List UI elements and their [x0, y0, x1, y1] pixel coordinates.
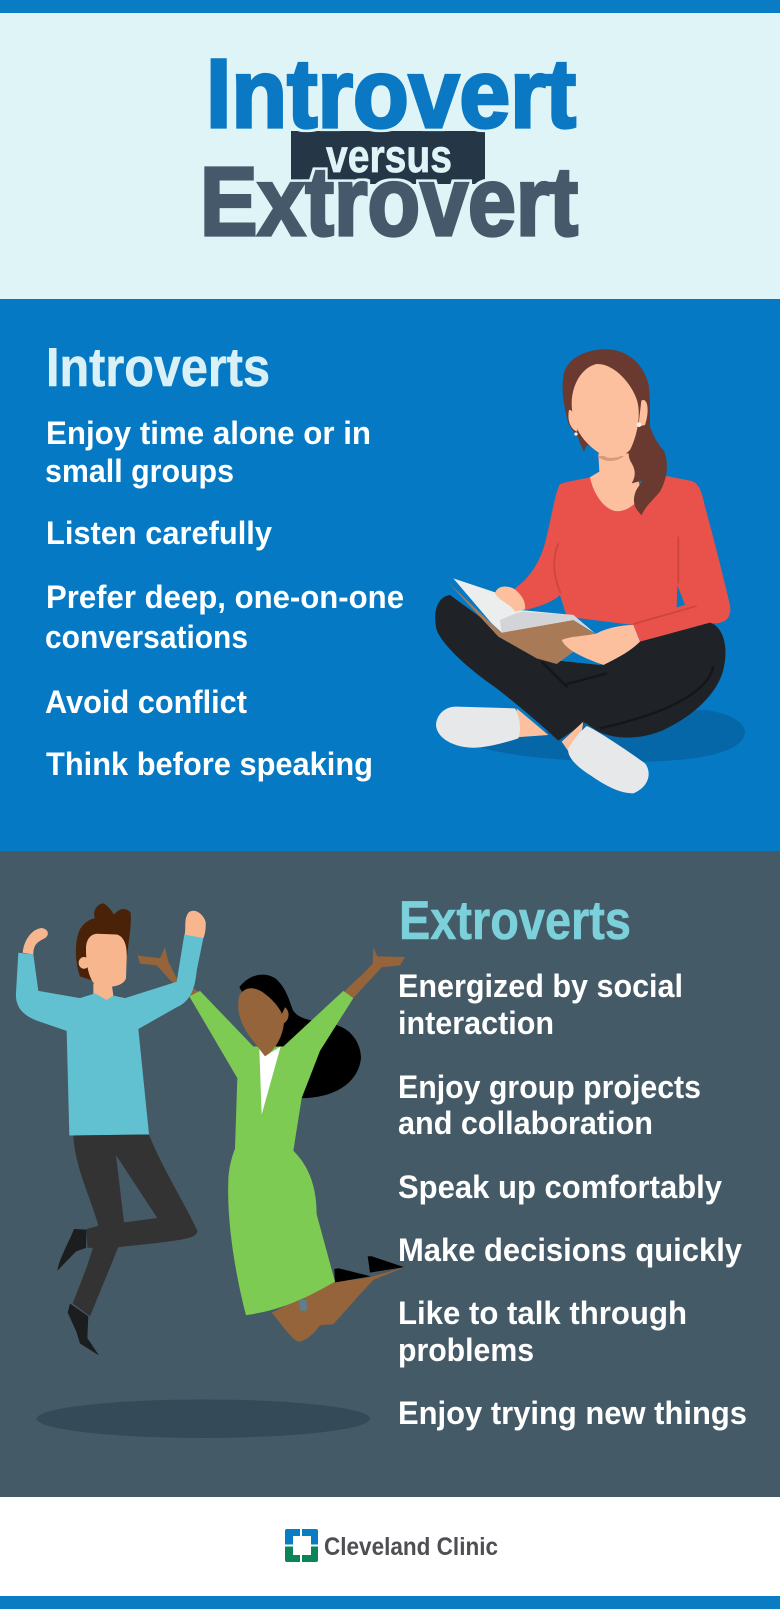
sleeve gap [677, 585, 685, 607]
title: Introvert: Introvert [206, 39, 576, 148]
list: introvert traits [45, 415, 404, 782]
right sock [562, 722, 583, 763]
list: extrovert traits: Make decisions quickly [398, 1232, 742, 1268]
woman: dress [189, 991, 353, 1315]
list: extrovert traits: Enjoy trying new things [398, 1395, 747, 1431]
list: introvert traits: Prefer deep, one-on-one [46, 579, 404, 615]
list: introvert traits: Listen carefully [46, 515, 272, 551]
logo: Cleveland Clinic wordmark: Cleveland Clinic [324, 1533, 498, 1561]
list: introvert traits: conversations [45, 619, 248, 655]
trousers [435, 595, 726, 741]
woman: gap patch [299, 1300, 307, 1311]
neck and chest [589, 453, 642, 512]
list: extrovert traits: Energized by social [398, 968, 683, 1004]
man: sweater [16, 935, 203, 1136]
woman: back hand [138, 947, 200, 998]
sweater [515, 476, 730, 642]
logo: Cleveland Clinic icon [285, 1529, 318, 1562]
panel: header [0, 13, 780, 299]
book [448, 583, 597, 664]
woman: blouse [259, 1046, 281, 1114]
socks and ankles [515, 708, 548, 737]
man: upper leg bend [87, 1225, 118, 1248]
man: face [86, 934, 127, 987]
sweater folds [554, 537, 697, 624]
earrings [637, 422, 641, 427]
list: extrovert traits: interaction [398, 1005, 554, 1041]
man: fists [23, 928, 48, 955]
trouser creases [542, 662, 713, 728]
list: extrovert traits: problems [398, 1332, 534, 1368]
hands [495, 586, 525, 612]
list: extrovert traits: Like to talk through [398, 1295, 687, 1331]
panel: introverts [0, 299, 780, 851]
woman: ear, face [280, 1007, 289, 1024]
top bar [0, 0, 780, 13]
bottom bar [0, 1596, 780, 1609]
list: introvert traits: Think before speaking [46, 746, 373, 782]
man: ear, neck [93, 984, 113, 1001]
versus box [291, 131, 485, 184]
chin shadow [597, 456, 624, 461]
hair lock [629, 397, 667, 515]
woman: forward arm [343, 947, 405, 998]
title: versus: versus [326, 130, 452, 182]
hair [563, 349, 650, 463]
heading: Extroverts: Extroverts [399, 889, 631, 951]
woman: shoes [334, 1268, 371, 1282]
list: extrovert traits: Speak up comfortably [398, 1169, 722, 1205]
face [572, 364, 639, 458]
floor shadow [480, 710, 745, 762]
woman: hair [239, 975, 361, 1098]
ears [568, 400, 648, 432]
man: shoes [57, 1229, 87, 1271]
man: hair [76, 904, 131, 985]
panel: footer [0, 1497, 780, 1596]
list: introvert traits: Avoid conflict [45, 684, 247, 720]
list: introvert traits: Enjoy time alone or in [46, 415, 371, 451]
man: trousers [73, 1134, 197, 1316]
list: extrovert traits: Enjoy group projects [398, 1069, 701, 1105]
illustration: jumping people [16, 904, 405, 1438]
list: extrovert traits [398, 968, 747, 1431]
heading: Introverts: Introverts [46, 336, 270, 398]
title: Extrovert: Extrovert [200, 147, 578, 256]
floor shadow [37, 1399, 370, 1438]
panel: extroverts [0, 851, 780, 1497]
illustration: woman reading [435, 349, 745, 793]
woman: legs [272, 1267, 405, 1342]
list: introvert traits: small groups [45, 453, 234, 489]
list: extrovert traits: and collaboration [398, 1105, 653, 1141]
